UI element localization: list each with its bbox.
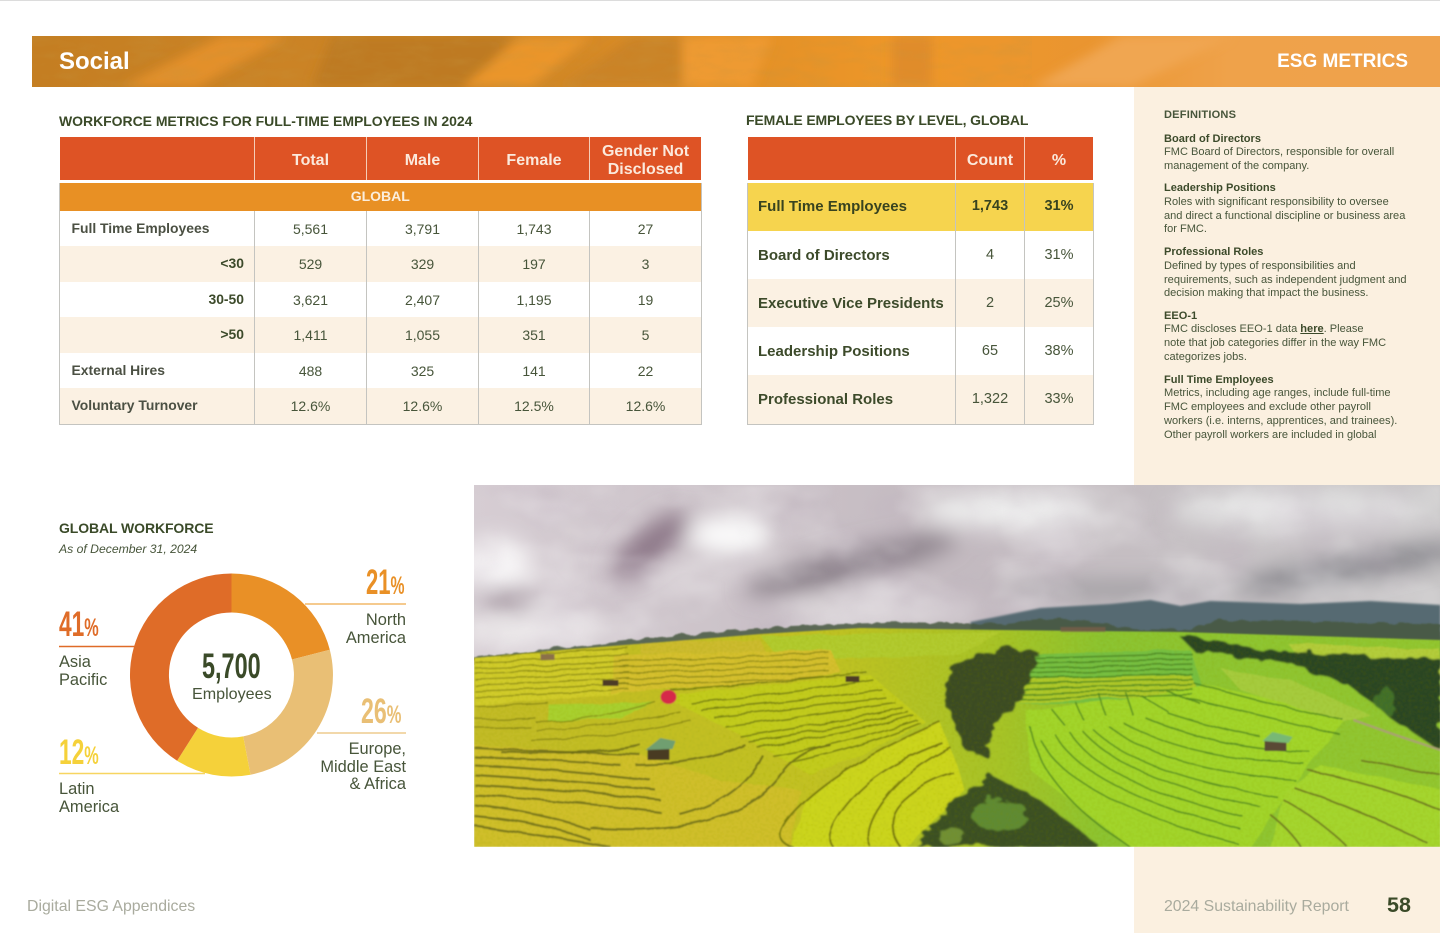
definition: Professional Roles: Professional Roles [1164, 246, 1263, 258]
label: Asia Pacific [59, 653, 107, 688]
table header: workforce metrics: Female [506, 152, 562, 168]
table: workforce metrics [58, 183, 702, 424]
definition: Leadership Positions [1164, 182, 1406, 235]
table: workforce metrics: <30 [220, 255, 244, 271]
stat: Asia Pacific: 41% [59, 605, 99, 644]
footer: left label: Digital ESG Appendices [27, 898, 195, 915]
table: workforce metrics: GLOBAL [351, 188, 410, 204]
table: female employees: 25% [1044, 295, 1074, 311]
table: workforce metrics: 22 [638, 362, 653, 378]
section title: Social: Social [59, 48, 130, 75]
label: Latin America: Latin [59, 780, 95, 798]
table: female employees: 31% [1044, 198, 1074, 214]
table: workforce metrics: 19 [638, 292, 653, 308]
heading: definitions: DEFINITIONS [1164, 109, 1236, 121]
segment: North America 21% [232, 574, 330, 660]
label: North America: North [366, 611, 406, 629]
label: Europe: Middle East [320, 758, 406, 776]
table: workforce metrics: 488 [299, 362, 322, 378]
terrace lines: right centre [1000, 654, 1343, 847]
table: workforce metrics: 1,055 [405, 327, 440, 343]
photo: rice terraces [474, 485, 1440, 847]
footer: report name: 2024 Sustainability Report [1164, 898, 1349, 915]
table: female employees: 1,322 [972, 391, 1008, 407]
definition: Board of Directors: FMC Board of Directors, responsible for overall [1164, 146, 1394, 158]
definition: Professional Roles [1164, 246, 1407, 299]
segment: Latin America 12% [177, 728, 250, 776]
definition: Leadership Positions: for FMC. [1164, 223, 1207, 235]
table: female employees: 31% [1044, 247, 1074, 263]
table: workforce metrics: 12.6% [291, 398, 330, 414]
definition: EEO-1: categorizes jobs. [1164, 351, 1247, 363]
table: workforce metrics: External Hires [72, 362, 165, 378]
table: workforce metrics: 5 [642, 327, 649, 343]
table header: female employees: % [1052, 152, 1066, 168]
subheading: date: As of December 31, 2024 [59, 542, 197, 556]
definition: EEO-1 [1164, 310, 1386, 363]
label: North America [346, 611, 406, 646]
leader lines [59, 604, 406, 774]
label: Latin America [59, 780, 120, 816]
terrace lines: fan [780, 722, 953, 847]
definition: Board of Directors: management of the company. [1164, 160, 1309, 172]
section label: ESG Metrics: ESG METRICS [1277, 51, 1408, 72]
table: female employees: Full Time Employees [758, 198, 907, 214]
segment: Asia Pacific 41% [130, 573, 232, 761]
table: female employees: 65 [982, 343, 998, 359]
definition: Full Time Employees: Full Time Employees [1164, 374, 1274, 386]
table header: workforce metrics: Disclosed [608, 160, 683, 178]
definition: Full Time Employees: Other payroll workers are included in global [1164, 428, 1376, 440]
footer: page number: 58 [1387, 893, 1411, 917]
table header: workforce metrics: Male [405, 152, 440, 168]
table: workforce metrics: Full Time Employees [72, 220, 209, 236]
table: workforce metrics: 329 [411, 256, 434, 272]
fields and trees [473, 620, 1440, 847]
table: workforce metrics: 1,195 [516, 292, 552, 308]
table: female employees: 2 [986, 295, 994, 311]
icons: huts and shrine [540, 627, 1292, 760]
stat: Europe: 26% [361, 692, 401, 731]
terrace lines: bottom right [1270, 760, 1440, 847]
definition: Professional Roles: Defined by types of responsibilities and [1164, 260, 1356, 272]
table: female employees: 4 [986, 247, 994, 263]
stat: North America: 21% [366, 563, 405, 602]
definition: EEO-1: FMC discloses EEO-1 data here. Please [1164, 323, 1364, 335]
table header: workforce metrics: Total [292, 152, 329, 168]
table: workforce metrics: Voluntary Turnover [72, 397, 198, 413]
definition: Professional Roles: decision making that impact the business. [1164, 287, 1368, 299]
donut centre: caption: Employees [192, 685, 272, 703]
distant mountains [970, 600, 1440, 650]
table: workforce metrics: 529 [299, 256, 322, 272]
table: female employees: 1,743 [972, 198, 1008, 214]
table: female employees: 38% [1044, 343, 1074, 359]
label: Europe: Europe, [349, 740, 406, 758]
definition: EEO-1: EEO-1 [1164, 310, 1197, 322]
table: workforce metrics: 3 [642, 256, 649, 272]
table: workforce metrics: 12.6% [403, 398, 442, 414]
table: workforce metrics: 12.6% [626, 398, 665, 414]
terrace lines: diagonal block [670, 672, 920, 763]
table: workforce metrics: 1,743 [516, 220, 552, 236]
donut centre: total: 5,700 [202, 646, 261, 686]
table: female employees [746, 183, 1094, 424]
table: workforce metrics: 1,411 [294, 327, 328, 343]
table: workforce metrics: 141 [522, 362, 546, 378]
header band [32, 36, 1440, 87]
definition: EEO-1: note that job categories differ in the way FMC [1164, 337, 1386, 349]
definition: Leadership Positions: Roles with significant responsibility to oversee [1164, 196, 1389, 208]
table: workforce metrics: 30-50 [208, 291, 244, 307]
table: workforce metrics: 325 [411, 362, 434, 378]
trees [915, 632, 1440, 847]
table: female employees: Executive Vice Presidents [758, 294, 944, 312]
heading: female employees: FEMALE EMPLOYEES BY LEVEL, GLOBAL [746, 112, 1028, 128]
definition: Leadership Positions: and direct a functional discipline or business area [1164, 210, 1405, 222]
panel: definitions background [1134, 87, 1440, 933]
table: workforce metrics: 197 [522, 256, 546, 272]
table: workforce metrics: 351 [522, 327, 546, 343]
definition: Full Time Employees: Metrics, including age ranges, include full-time [1164, 387, 1391, 399]
definition: Full Time Employees: FMC employees and exclude other payroll [1164, 401, 1371, 413]
table: workforce metrics: 3,791 [405, 220, 440, 236]
heading: workforce metrics: WORKFORCE METRICS FOR FULL-TIME EMPLOYEES IN 2024 [59, 113, 472, 129]
table header: workforce metrics [60, 137, 701, 180]
table header: female employees [748, 137, 1093, 180]
table: female employees: Leadership Positions [758, 342, 910, 360]
definition: Board of Directors [1164, 132, 1394, 172]
stat: Latin America: 12% [59, 733, 99, 772]
label: Latin America: America [59, 798, 119, 816]
tree line [473, 618, 1440, 660]
segment: Europe, Middle East & Africa 26% [243, 650, 333, 775]
table: workforce metrics: >50 [220, 326, 244, 342]
terrace lines: upper left [474, 648, 828, 740]
table: female employees: Board of Directors [758, 246, 890, 264]
label: North America: America [346, 628, 406, 646]
label: Asia Pacific: Asia [59, 653, 91, 671]
table: female employees: 33% [1044, 391, 1074, 407]
table header: female employees: Count [967, 152, 1013, 168]
table: workforce metrics: 5,561 [293, 220, 328, 236]
table: workforce metrics: 12.5% [514, 398, 554, 414]
definition: Leadership Positions: Leadership Positions [1164, 182, 1276, 194]
table: workforce metrics: 3,621 [293, 292, 328, 308]
definition: Full Time Employees: workers (i.e. interns, apprentices, and trainees). [1164, 415, 1397, 427]
path [1353, 720, 1440, 750]
label: Europe: & Africa [350, 775, 406, 793]
definition: Full Time Employees [1164, 374, 1397, 440]
table: workforce metrics: 2,407 [405, 292, 440, 308]
table: workforce metrics: 27 [638, 220, 653, 236]
label: Asia Pacific: Pacific [59, 670, 107, 688]
terraced fields [473, 620, 1440, 847]
table: female employees: Professional Roles [758, 391, 893, 408]
terrace lines: lower left [474, 745, 830, 847]
sky [460, 485, 1440, 665]
heading: global workforce: GLOBAL WORKFORCE [59, 520, 213, 536]
definition: Professional Roles: requirements, such as independent judgment and [1164, 274, 1407, 286]
definition: Board of Directors: Board of Directors [1164, 132, 1261, 144]
table header: workforce metrics: Gender Not [602, 142, 689, 160]
donut chart: global workforce [59, 574, 406, 776]
label: Europe [320, 740, 406, 793]
